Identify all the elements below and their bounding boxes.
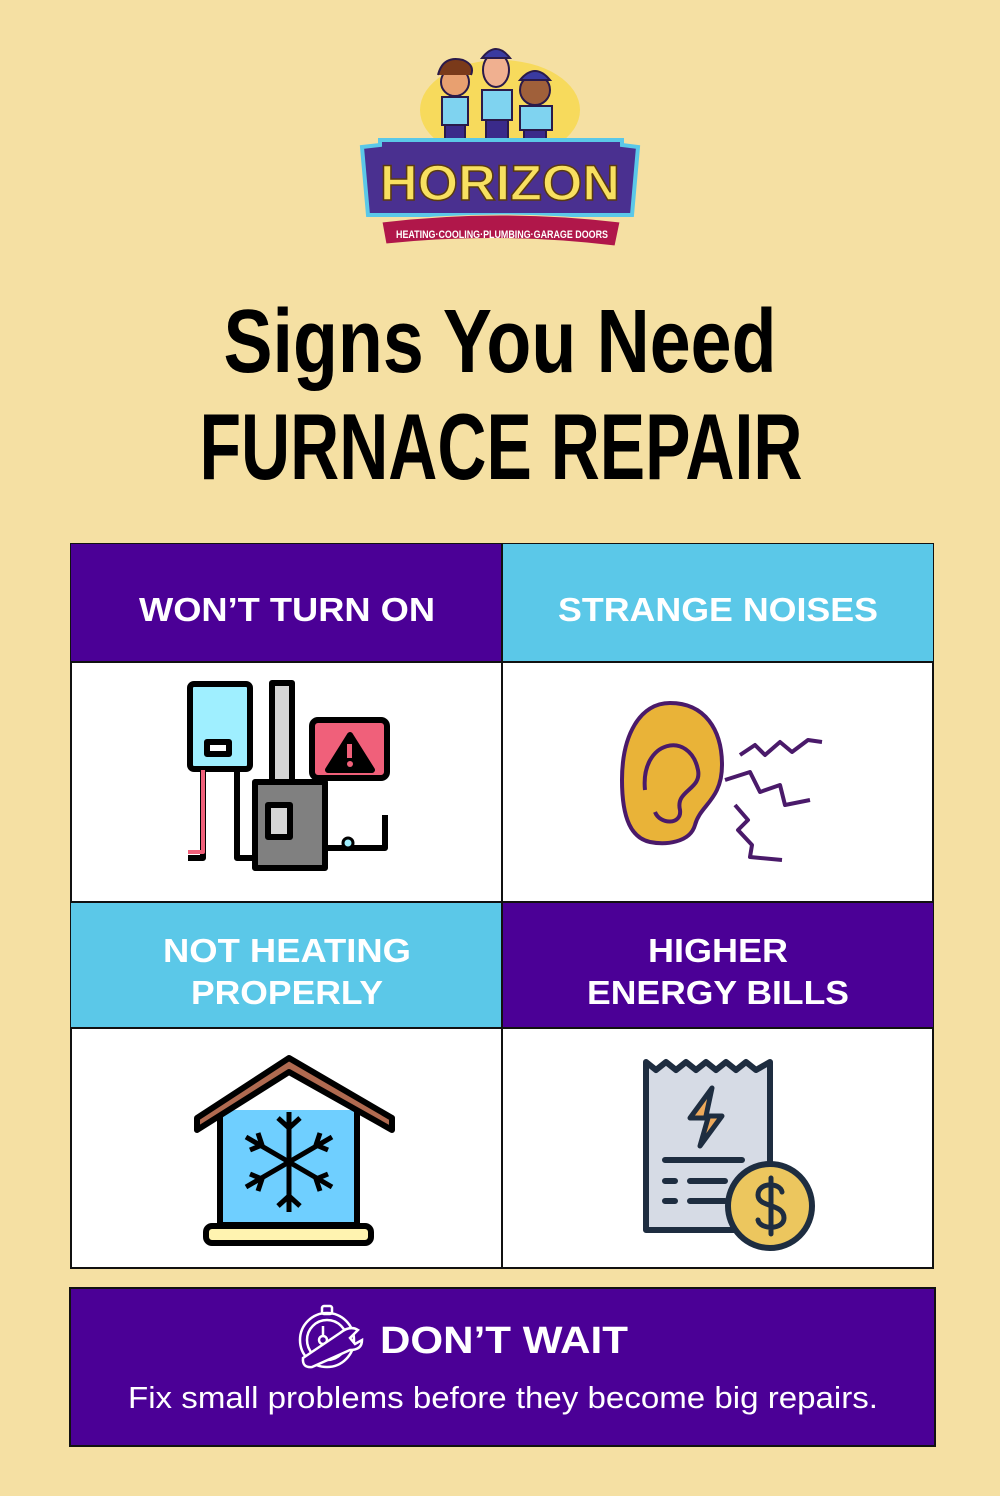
grid of signs <box>71 544 933 1268</box>
logo: HEATING·COOLING·PLUMBING·GARAGE DOORS <box>396 229 608 241</box>
callout: don't wait: DON’T WAIT <box>380 1320 628 1362</box>
title: Signs You Need <box>224 292 776 392</box>
icon: cold house <box>197 1058 392 1243</box>
icon: furnace warning <box>188 683 387 868</box>
icon: ear with sound waves <box>622 703 822 860</box>
banner <box>362 140 638 215</box>
panel: higher energy bills: ENERGY BILLS <box>587 974 849 1011</box>
panel: not heating properly <box>71 902 502 1243</box>
icon: bill with dollar <box>646 1062 812 1248</box>
logo: HORIZON <box>380 155 620 211</box>
panel: won't turn on: WON’T TURN ON <box>139 591 435 628</box>
title <box>200 292 802 499</box>
panel: higher energy bills <box>503 902 933 1248</box>
panel: strange noises: STRANGE NOISES <box>558 591 878 628</box>
panel: not heating properly: NOT HEATING <box>163 932 411 969</box>
panel: won't turn on <box>71 544 502 868</box>
panel: not heating properly: PROPERLY <box>191 974 383 1011</box>
icon: stopwatch with wrench <box>300 1306 362 1367</box>
logo <box>362 49 638 246</box>
callout: don't wait <box>70 1288 935 1446</box>
figures <box>438 49 552 152</box>
callout: don't wait: Fix small problems before they become big repairs. <box>128 1380 878 1415</box>
panel: strange noises <box>503 544 933 860</box>
panel: higher energy bills: HIGHER <box>648 932 788 969</box>
grid lines <box>71 544 933 1268</box>
